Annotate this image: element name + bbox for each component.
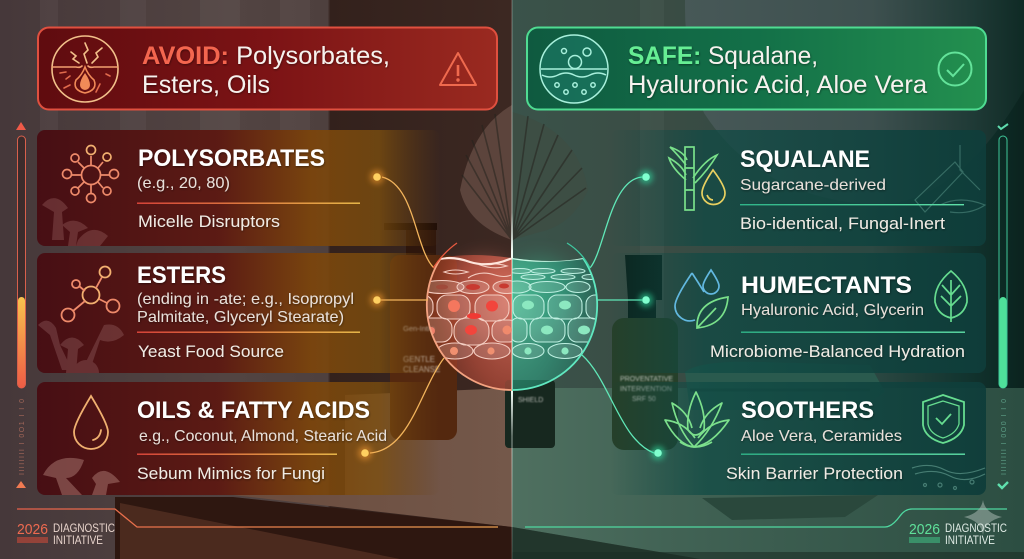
mirror on right wall (685, 0, 1024, 205)
ingredient text (137, 397, 387, 483)
left gauge: IIIIIIII I 0O1 I I 0 (19, 399, 26, 475)
footer: right (525, 500, 1007, 547)
ingredient text: Aloe Vera, Ceramides (741, 428, 902, 445)
heading text: AVOID: Polysorbates, (142, 42, 390, 70)
panel: oils and fatty acids (37, 382, 440, 495)
ingredient text: (e.g., 20, 80) (137, 175, 230, 192)
center dark bottle (505, 380, 555, 448)
panel: soothers (610, 382, 986, 495)
amber bottle: CLEANSE (403, 365, 440, 374)
icon: irritated follicle (52, 36, 118, 102)
amber bottle (384, 223, 457, 440)
ingredient text: POLYSORBATES (138, 145, 325, 172)
icon: leaf (935, 271, 967, 322)
sugarcane illustration (915, 145, 985, 213)
footer: left: 2026 (17, 521, 48, 538)
icon: sugarcane and drop (669, 147, 725, 210)
icon: molecule (62, 146, 118, 202)
ingredient text (740, 146, 945, 233)
header: safe (527, 28, 986, 110)
ingredient text: OILS & FATTY ACIDS (137, 397, 370, 424)
icon: aloe vera (665, 392, 729, 447)
footer: right: INITIATIVE (945, 533, 995, 547)
ingredient text (726, 397, 903, 483)
folded towel (685, 362, 885, 410)
heading text: Hyaluronic Acid, Aloe Vera (628, 71, 927, 99)
amber bottle: Gen-Intro (403, 324, 435, 333)
mushroom illustration (43, 458, 120, 495)
icon: healthy skin cross-section (540, 35, 608, 103)
decorative sparkle (964, 500, 1002, 535)
ingredient text: SOOTHERS (741, 397, 874, 424)
mushroom illustration (38, 321, 124, 373)
footer: left: INITIATIVE (53, 533, 103, 547)
ingredient text (710, 272, 965, 361)
ingredient text: Hyaluronic Acid, Glycerin (741, 302, 924, 319)
green bottle: INTERVENTION (620, 386, 672, 393)
ingredient text: ESTERS (137, 262, 226, 289)
icon: ester molecule (62, 266, 120, 322)
red inflamed cells (428, 264, 512, 360)
ingredient text: e.g., Coconut, Almond, Stearic Acid (139, 428, 387, 445)
panel: humectants (610, 253, 986, 373)
icon: check circle (938, 52, 972, 86)
panel: squalane (610, 130, 986, 246)
green bottle: PROVENTATIVE (620, 376, 673, 383)
ingredient text: (ending in -ate; e.g., Isopropyl (137, 291, 354, 308)
skin cross-section circle (426, 248, 598, 391)
ingredient text (137, 145, 325, 231)
footer: right: DIAGNOSTIC (945, 521, 1007, 535)
heading text: SAFE: Squalane, (628, 42, 818, 70)
header: avoid (38, 28, 497, 110)
connector dots right (639, 170, 665, 460)
right gauge: IIIIIIII I 0O0 I I 0 (1001, 399, 1008, 475)
circle outline left (427, 258, 512, 390)
green healthy cells (512, 268, 596, 359)
skin wave illustration (912, 465, 985, 490)
ingredient text: Sugarcane-derived (740, 177, 886, 194)
ingredient text: Bio-identical, Fungal-Inert (740, 215, 945, 233)
ingredient text: Palmitate, Glyceryl Stearate) (137, 309, 344, 326)
green bottle (612, 255, 678, 450)
ingredient text: Skin Barrier Protection (726, 465, 903, 483)
footer: left: DIAGNOSTIC (53, 521, 115, 535)
connector dots left (358, 170, 384, 460)
ingredient text: SQUALANE (740, 146, 870, 173)
panel: esters (37, 253, 440, 373)
ingredient text (137, 262, 354, 361)
heading text: Esters, Oils (142, 71, 270, 99)
icon: oil drop (74, 396, 108, 449)
icon: warning triangle (440, 53, 476, 85)
heading text (142, 42, 390, 99)
fan palm leaf (460, 105, 588, 240)
right gauge (998, 124, 1008, 488)
ingredient text: Micelle Disruptors (138, 213, 280, 231)
footer: right: 2026 (909, 521, 940, 538)
marble counter top (115, 388, 1024, 559)
ingredient text: Microbiome-Balanced Hydration (710, 343, 965, 361)
connector curves left (370, 177, 457, 453)
footer: left (17, 509, 498, 547)
ingredient text: HUMECTANTS (741, 272, 912, 299)
center divider (511, 0, 513, 559)
center dark bottle: SHIELD (518, 397, 543, 404)
heading text (628, 42, 927, 99)
icon: shield with check (923, 395, 964, 443)
ingredient text: Yeast Food Source (138, 343, 284, 361)
icon: water drops and leaf (675, 270, 728, 328)
connector curves right (567, 177, 654, 453)
green bottle: SRF 50 (632, 396, 656, 403)
circle outline right (512, 258, 597, 390)
ingredient text: Sebum Mimics for Fungi (137, 465, 325, 483)
left gauge (16, 122, 26, 488)
panel: polysorbates (37, 130, 440, 246)
amber bottle: GENTLE (403, 355, 435, 364)
mushroom illustration (42, 198, 108, 246)
